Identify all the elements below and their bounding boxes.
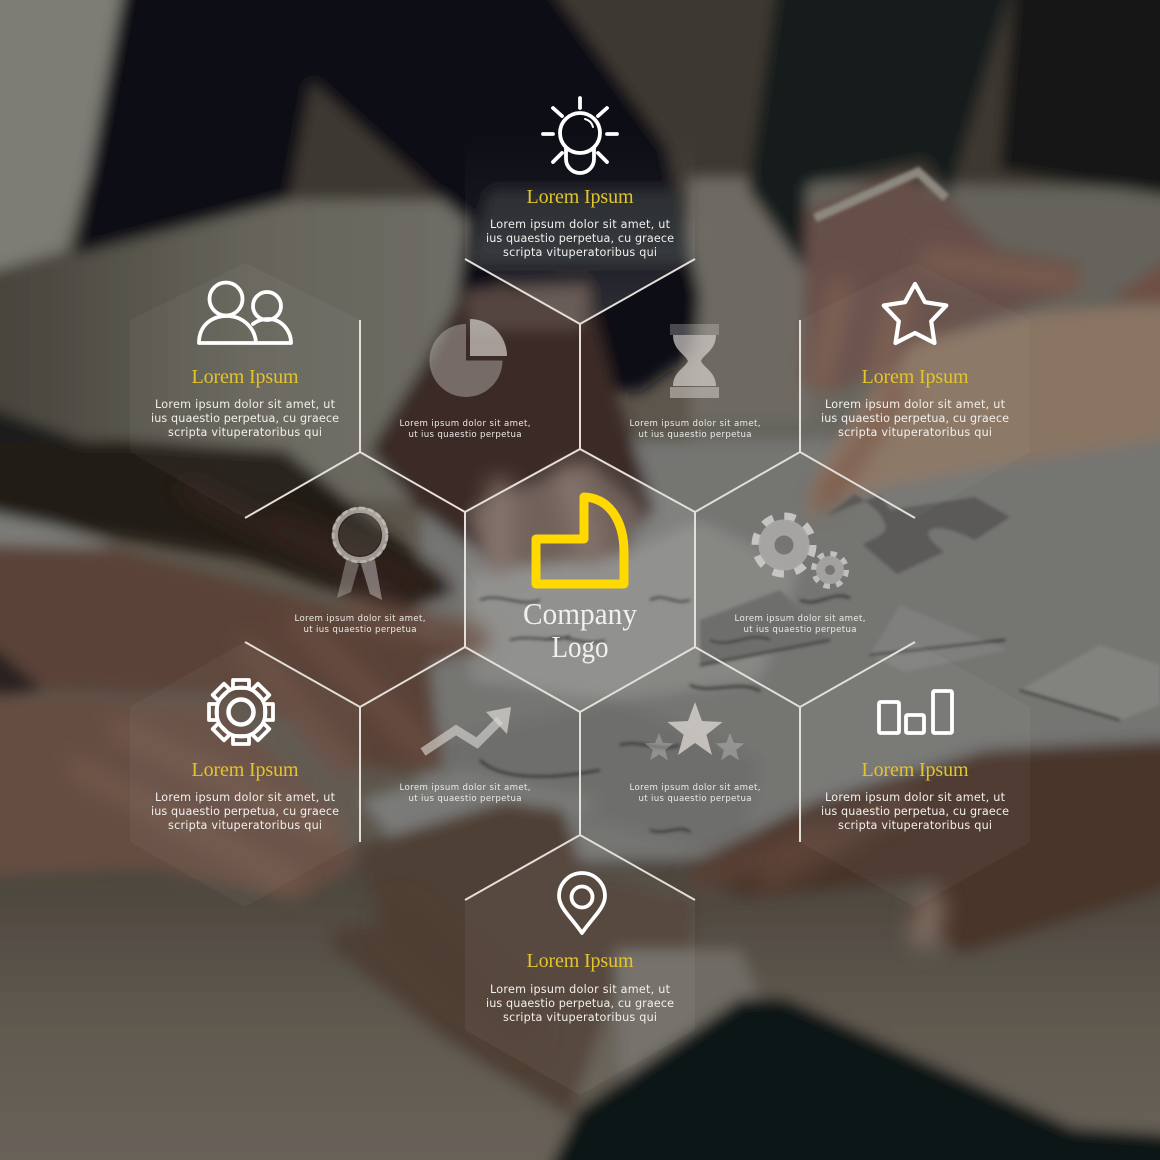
wristwatch — [815, 172, 946, 218]
lower left hand — [0, 695, 355, 898]
upper right panel text: scripta vituperatoribus qui — [838, 426, 992, 439]
small text: pie — [400, 419, 530, 440]
upper right panel text: Lorem ipsum dolor sit amet, ut — [825, 398, 1006, 411]
small text: pie: Lorem ipsum dolor sit amet, — [400, 419, 530, 429]
lower left panel text: scripta vituperatoribus qui — [168, 819, 322, 832]
upper left panel text — [151, 366, 339, 439]
puzzle piece dark grey — [826, 494, 1010, 574]
small text: award: Lorem ipsum dolor sit amet, — [294, 614, 426, 624]
icon: hourglass — [670, 324, 719, 398]
lower left panel text: ius quaestio perpetua, cu graece — [151, 805, 339, 818]
small text: arrow: Lorem ipsum dolor sit amet, — [400, 783, 530, 793]
icon: bar chart — [879, 691, 952, 733]
lower right panel text: ius quaestio perpetua, cu graece — [821, 805, 1009, 818]
upper right panel text: ius quaestio perpetua, cu graece — [821, 412, 1009, 425]
upper left panel text: scripta vituperatoribus qui — [168, 426, 322, 439]
upper right hand — [802, 175, 1080, 392]
lower right panel text: Lorem Ipsum — [862, 759, 969, 781]
top panel text: scripta vituperatoribus qui — [503, 246, 657, 259]
dark central hand — [370, 295, 655, 560]
top right finger — [1120, 262, 1160, 304]
upper left panel text: Lorem ipsum dolor sit amet, ut — [155, 398, 336, 411]
icon: light bulb — [543, 98, 617, 173]
dark suit right — [748, 0, 1015, 270]
center logo: Logo — [552, 629, 608, 664]
bottom white cuff — [615, 950, 760, 1100]
puzzle details — [480, 172, 1160, 832]
icon: gears — [756, 517, 846, 586]
lower right panel text: scripta vituperatoribus qui — [838, 819, 992, 832]
small text: gears: Lorem ipsum dolor sit amet, — [734, 614, 866, 624]
dark gap — [0, 646, 42, 701]
small text: award — [294, 614, 426, 635]
small text: hourglass — [630, 419, 760, 440]
white shirt — [0, 0, 128, 275]
small text: gears: ut ius quaestio perpetua — [744, 625, 856, 635]
puzzle in center — [470, 520, 800, 700]
center logo — [523, 497, 637, 664]
company logo text: Company — [523, 596, 637, 631]
upper right panel text: Lorem Ipsum — [862, 366, 969, 388]
lower left panel text — [151, 759, 339, 832]
lower right panel text: Lorem ipsum dolor sit amet, ut — [825, 791, 1006, 804]
bottom suit — [544, 998, 1160, 1160]
icon: award ribbon — [333, 508, 387, 600]
small text: hourglass: Lorem ipsum dolor sit amet, — [630, 419, 760, 429]
lower right panel text — [821, 759, 1009, 832]
bottom panel text: Lorem Ipsum — [526, 950, 634, 972]
lower left panel text: Lorem ipsum dolor sit amet, ut — [155, 791, 336, 804]
left mid hand — [0, 545, 489, 770]
small text: stars: Lorem ipsum dolor sit amet, — [630, 783, 760, 793]
bottom panel text — [486, 950, 674, 1024]
icon: cog — [209, 680, 273, 744]
hexagon tint panels — [130, 130, 1030, 1095]
small text: stars — [630, 783, 760, 804]
bottom panel text: ius quaestio perpetua, cu graece — [486, 997, 674, 1010]
bottom panel text: Lorem ipsum dolor sit amet, ut — [490, 983, 671, 996]
top panel text — [486, 186, 674, 259]
pale shirt cuff — [0, 502, 116, 556]
top panel text: Lorem ipsum dolor sit amet, ut — [490, 218, 671, 231]
upper right panel text — [821, 366, 1009, 439]
left dark hand — [0, 440, 455, 612]
icon: yellow logo mark — [536, 497, 624, 584]
small text: gears — [734, 614, 866, 635]
small text: pie: ut ius quaestio perpetua — [408, 430, 522, 440]
top panel text: Lorem Ipsum — [526, 186, 634, 208]
icon: pie chart — [430, 319, 507, 397]
lower left panel text: Lorem Ipsum — [192, 759, 299, 781]
icon: map pin — [559, 873, 605, 933]
small text: arrow — [400, 783, 530, 804]
small text: award: ut ius quaestio perpetua — [304, 625, 416, 635]
top panel text: ius quaestio perpetua, cu graece — [486, 232, 674, 245]
right pointing hand — [805, 304, 1160, 520]
small text: hourglass: ut ius quaestio perpetua — [638, 430, 752, 440]
icon: star outline — [884, 284, 946, 343]
right lower hand — [689, 740, 1160, 954]
dark suit left — [74, 0, 700, 392]
upper left panel text: ius quaestio perpetua, cu graece — [151, 412, 339, 425]
icon: people — [199, 282, 291, 343]
honeycomb lines — [245, 259, 915, 900]
cuff sleeve left — [0, 407, 78, 452]
soft fingers — [80, 260, 1070, 1030]
upper left panel text: Lorem Ipsum — [192, 366, 299, 388]
small text: arrow: ut ius quaestio perpetua — [408, 794, 522, 804]
small text: stars: ut ius quaestio perpetua — [638, 794, 752, 804]
bottom panel text: scripta vituperatoribus qui — [503, 1011, 657, 1024]
icon: three stars — [645, 702, 744, 760]
bottom hand — [333, 802, 696, 1117]
icon: growth arrow — [423, 707, 511, 752]
